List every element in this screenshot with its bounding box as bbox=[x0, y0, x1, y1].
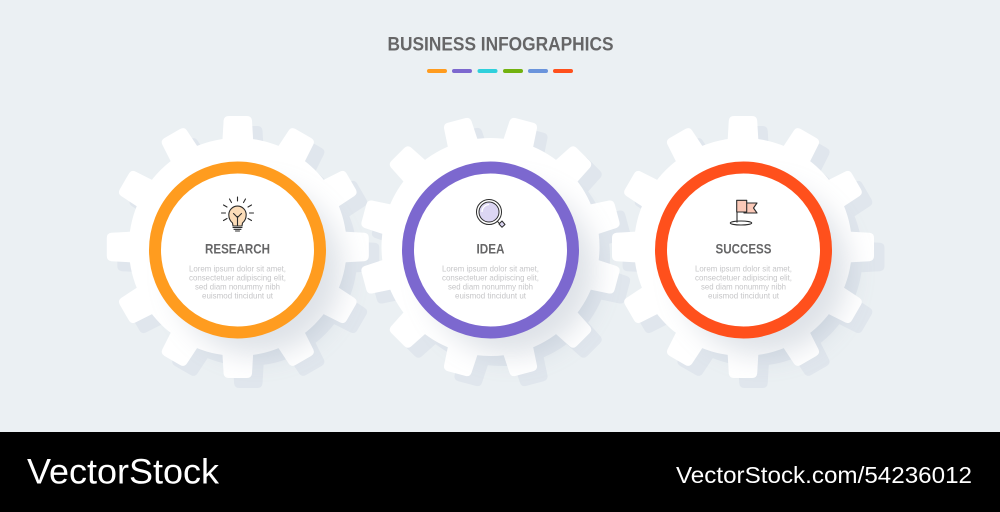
text: idea: sed diam nonummy nibh bbox=[448, 282, 533, 292]
ring shadow: success bbox=[680, 187, 848, 355]
footer band bbox=[0, 432, 1000, 512]
text: research: consectetuer adipiscing elit, bbox=[189, 274, 286, 282]
gear: idea bbox=[330, 87, 651, 407]
text: idea: Lorem ipsum dolor sit amet, bbox=[442, 264, 539, 274]
ring shadow: idea bbox=[427, 187, 595, 355]
text: research: euismod tincidunt ut bbox=[202, 292, 274, 300]
text: idea: euismod tincidunt ut bbox=[455, 292, 527, 300]
ring shadow: research bbox=[174, 187, 342, 355]
text: success: consectetuer adipiscing elit, bbox=[695, 274, 792, 282]
ring: research bbox=[155, 168, 320, 332]
ring: idea bbox=[408, 168, 573, 332]
title: BUSINESS INFOGRAPHICS bbox=[388, 34, 614, 56]
heading: research: RESEARCH bbox=[205, 240, 270, 256]
gear: research bbox=[107, 116, 369, 378]
text: research bbox=[189, 264, 286, 300]
text: idea: consectetuer adipiscing elit, bbox=[442, 274, 539, 282]
gear: success bbox=[612, 116, 874, 378]
text: success: euismod tincidunt ut bbox=[708, 292, 780, 300]
icon: flag bbox=[730, 200, 757, 225]
text: idea bbox=[442, 264, 539, 300]
text: research: sed diam nonummy nibh bbox=[195, 282, 280, 292]
panel: idea bbox=[330, 87, 651, 407]
text: success: sed diam nonummy nibh bbox=[701, 282, 786, 292]
gear shadows bbox=[117, 97, 885, 417]
heading: idea: IDEA bbox=[476, 240, 504, 256]
footer logo: VectorStock bbox=[27, 452, 219, 492]
colour dashes bbox=[427, 69, 573, 73]
heading: success: SUCCESS bbox=[716, 240, 772, 256]
ring: success bbox=[661, 168, 826, 332]
footer url: VectorStock.com/54236012 bbox=[676, 462, 972, 488]
text: research: Lorem ipsum dolor sit amet, bbox=[189, 264, 286, 274]
panel: research bbox=[107, 116, 369, 378]
text: success: Lorem ipsum dolor sit amet, bbox=[695, 264, 792, 274]
icon: light bulb bbox=[222, 197, 254, 231]
panel: success bbox=[612, 116, 874, 378]
text: success bbox=[695, 264, 792, 300]
icon: magnifying glass bbox=[476, 200, 505, 227]
